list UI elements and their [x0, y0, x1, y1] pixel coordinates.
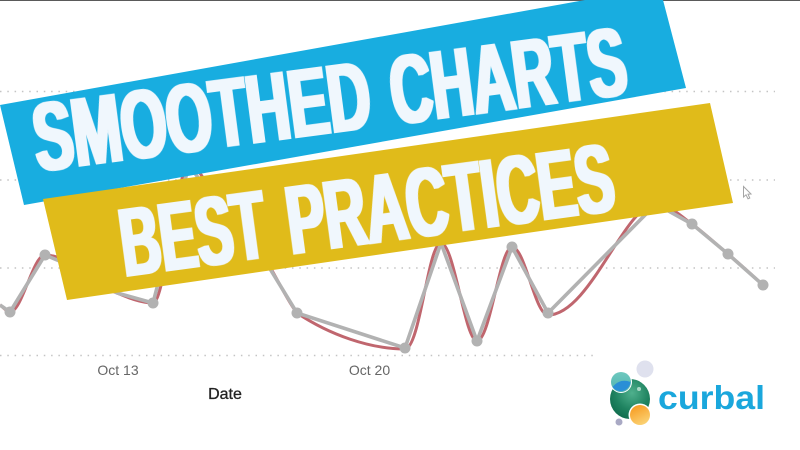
axis title: Date: Date	[208, 386, 242, 403]
heading: Best Practices	[113, 123, 620, 298]
icon: curbal bubbles	[610, 360, 654, 426]
heading: Smoothed Charts: SMOOTHED	[26, 40, 377, 193]
banner: blue title	[0, 0, 686, 205]
icon: mouse cursor	[744, 186, 751, 199]
axis label: Oct 13: Oct 13	[97, 362, 139, 378]
chart: straight grey line with markers	[0, 165, 768, 354]
wordmark: curbal: curbal	[658, 379, 765, 416]
axis label: Oct 20: Oct 20	[349, 362, 390, 378]
logo: curbal	[610, 360, 765, 426]
heading: Best Practices: BEST	[113, 170, 272, 298]
banner: gold subtitle	[43, 103, 733, 300]
chart: smoothed red line	[0, 165, 763, 349]
